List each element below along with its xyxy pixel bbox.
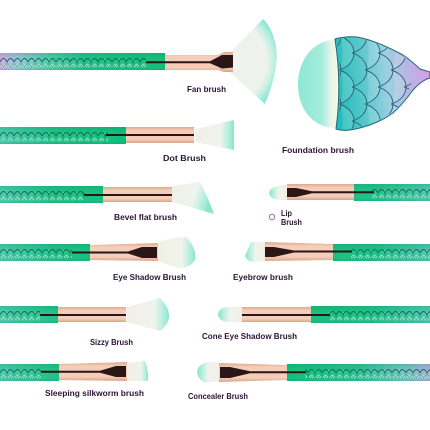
label: Foundation brush: Foundation brush <box>282 145 354 155</box>
brush: sleeping silkworm <box>0 361 148 381</box>
brush: fan <box>0 19 277 104</box>
label: Lip Brush: Lip <box>281 209 292 218</box>
brush: concealer <box>197 362 430 383</box>
brush: foundation <box>298 37 430 130</box>
brush: bevel flat <box>0 182 214 214</box>
label: Eyebrow brush: Eyebrow brush <box>233 272 293 282</box>
label: Sleeping silkworm brush: Sleeping silkworm brush <box>45 388 144 398</box>
label: Concealer Brush: Concealer Brush <box>188 391 248 401</box>
label: Sizzy Brush: Sizzy Brush <box>90 337 133 347</box>
label: Eye Shadow Brush: Eye Shadow Brush <box>113 272 186 282</box>
label: Dot Brush: Dot Brush <box>163 153 206 163</box>
brush: sizzy <box>0 298 169 331</box>
label: Fan brush: Fan brush <box>187 84 226 94</box>
label: Lip Brush <box>281 209 302 227</box>
brush: eyebrow <box>245 242 430 262</box>
brush: lip <box>269 184 430 201</box>
brush: eye shadow <box>0 237 195 268</box>
brush: cone eye shadow <box>218 306 430 323</box>
icon: lip brush ring <box>269 214 275 220</box>
label: Bevel flat brush: Bevel flat brush <box>114 212 177 222</box>
label: Cone Eye Shadow Brush: Cone Eye Shadow Brush <box>202 331 297 341</box>
label: Lip Brush: Brush <box>281 218 302 227</box>
brush: dot <box>0 120 234 150</box>
